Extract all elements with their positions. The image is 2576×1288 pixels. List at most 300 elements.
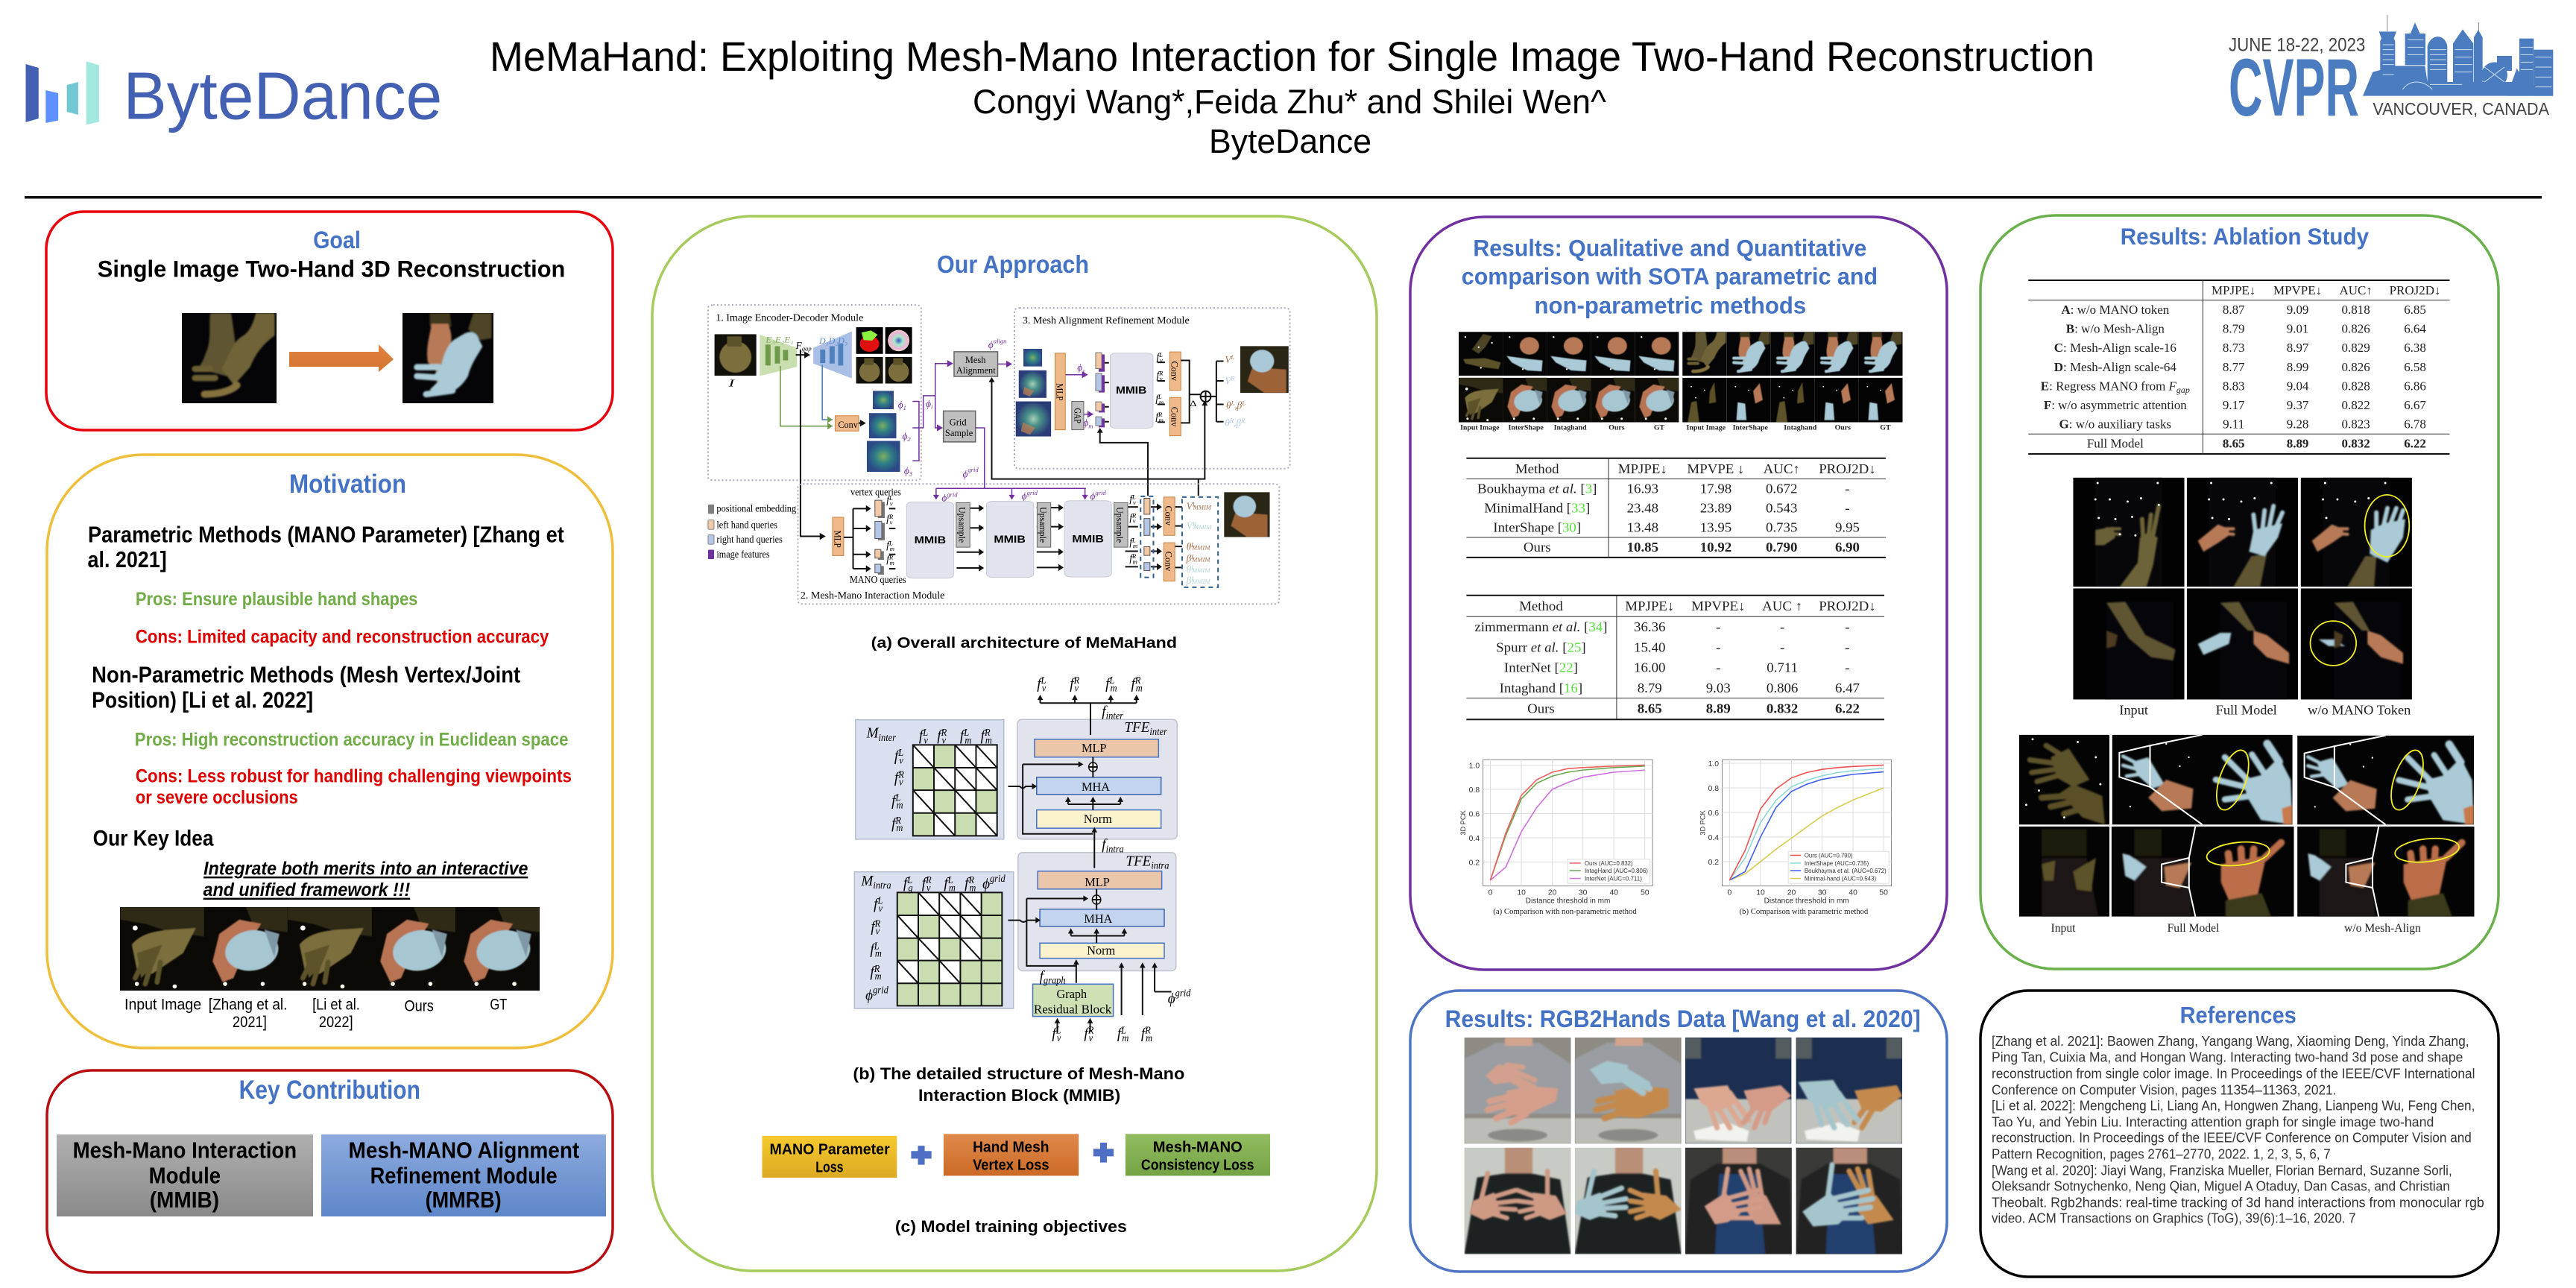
heading: our approach: Our Approach bbox=[937, 250, 1089, 278]
mesh alignment box: Mesh bbox=[965, 354, 986, 365]
module 2: mesh-mano interaction bbox=[798, 484, 1279, 604]
TFE inter block bbox=[1017, 703, 1177, 839]
M intra attention matrix: ϕ bbox=[982, 876, 990, 892]
TFE intra block bbox=[1018, 836, 1176, 970]
module 1: image encoder-decoder bbox=[708, 305, 921, 480]
feature labels: f bbox=[1070, 675, 1074, 692]
chart: non-parametric PCK: IntagHand (AUC=0.806) bbox=[1585, 868, 1648, 874]
module 2: mesh-mano interaction: L bbox=[1190, 564, 1195, 571]
icon: Vancouver skyline bbox=[2363, 15, 2553, 96]
module 3: mesh alignment refinement: ,β bbox=[1234, 417, 1241, 429]
feature labels: v bbox=[1042, 683, 1046, 694]
table: ablation: 6.86 bbox=[2404, 379, 2426, 393]
caption: input: Input bbox=[2051, 922, 2076, 935]
M inter attention matrix: M bbox=[867, 724, 879, 742]
module 3: mesh alignment refinement: m bbox=[1159, 398, 1164, 405]
chart: non-parametric PCK: 0.8 bbox=[1469, 786, 1480, 795]
chart: parametric PCK: 0.4 bbox=[1708, 834, 1719, 842]
module 2: mesh-mano interaction: MMIM bbox=[1191, 543, 1210, 551]
table: ablation: 0.818 bbox=[2342, 303, 2370, 317]
key idea statement line 2: and unified framework !!! bbox=[203, 880, 411, 900]
header rule bbox=[25, 196, 2542, 198]
module 3: mesh alignment refinement: ϕ bbox=[1077, 362, 1082, 373]
goal statement: Single Image Two-Hand 3D Reconstruction bbox=[98, 256, 565, 282]
table: non-parametric methods: 8.65 bbox=[1638, 701, 1662, 716]
feature labels: f bbox=[1037, 675, 1041, 692]
M intra attention matrix: L bbox=[874, 941, 880, 951]
module 3: mesh alignment refinement: R bbox=[1229, 417, 1234, 424]
grid sample box: Grid bbox=[950, 417, 967, 427]
chart: non-parametric PCK: 0.4 bbox=[1469, 835, 1480, 843]
chart: non-parametric PCK: 3D PCK bbox=[1459, 810, 1468, 836]
module 3: mesh alignment refinement: L bbox=[1241, 399, 1246, 406]
module 2: mesh-mano interaction: f bbox=[886, 554, 889, 565]
module 3: mesh alignment refinement: R bbox=[1230, 375, 1235, 382]
parametric methods line 2: al. 2021] bbox=[88, 548, 167, 572]
reference list: Pattern Recognition, pages 2761–2770, 2022. 1, 2, 3, 5, 6, 7 bbox=[1992, 1146, 2331, 1162]
TFE intra block: MLP bbox=[1085, 875, 1110, 889]
title block bbox=[490, 33, 2094, 160]
non-parametric methods: Non-Parametric Methods (Mesh Vertex/Joint bbox=[92, 663, 520, 688]
feature labels: f bbox=[1131, 675, 1135, 692]
table: ablation: 0.828 bbox=[2342, 379, 2370, 393]
table: non-parametric methods: 36.36 bbox=[1634, 619, 1665, 634]
module 2: mesh-mano interaction: L bbox=[1190, 553, 1195, 561]
table: non-parametric methods: - bbox=[1780, 640, 1784, 654]
logo wordmark: ByteDance bbox=[123, 58, 442, 133]
module 3: mesh alignment refinement: ,β bbox=[1234, 400, 1243, 411]
ablation upper contents bbox=[2028, 224, 2449, 717]
M intra attention matrix: R bbox=[925, 875, 932, 886]
module 1: image encoder-decoder: D₁D₂D₃ bbox=[818, 337, 847, 346]
TFE inter block: Norm bbox=[1084, 812, 1112, 826]
caption b line 2: Interaction Block (MMIB) bbox=[918, 1085, 1120, 1105]
heading: RGB2Hands: Results: RGB2Hands Data [Wang et al. 2020] bbox=[1445, 1006, 1921, 1032]
table: ablation: B: w/o Mesh-Align bbox=[2066, 322, 2165, 335]
arrow bbox=[289, 344, 394, 372]
TFE intra block: MHA bbox=[1084, 912, 1112, 926]
chart: parametric PCK bbox=[1699, 760, 1891, 916]
image: input hands bbox=[182, 313, 277, 403]
chart: parametric PCK: 0 bbox=[1728, 888, 1732, 897]
module 2: mesh-mano interaction: R bbox=[1192, 520, 1197, 528]
module 2: mesh-mano interaction: L bbox=[1190, 540, 1195, 548]
module 2: mesh-mano interaction: f bbox=[886, 494, 889, 505]
table: non-parametric methods: Method bbox=[1519, 599, 1563, 613]
table: ablation: 8.77 bbox=[2223, 360, 2245, 374]
table: non-parametric methods: 6.47 bbox=[1835, 681, 1860, 695]
table: parametric methods: 0.543 bbox=[1766, 501, 1797, 515]
module 3: mesh alignment refinement: f bbox=[1156, 370, 1159, 381]
phi labels: ϕ bbox=[1022, 490, 1027, 502]
module 1: image encoder-decoder: ϕ bbox=[903, 431, 907, 442]
qualitative comparison image grid bbox=[1459, 332, 1903, 423]
table: parametric methods: 17.98 bbox=[1700, 482, 1731, 496]
module 2: mesh-mano interaction: L bbox=[1131, 493, 1136, 500]
module 2: mesh-mano interaction: f bbox=[886, 539, 889, 550]
table: parametric methods: MinimalHand [33] bbox=[1484, 501, 1590, 515]
module 2: mesh-mano interaction: V bbox=[1187, 520, 1193, 531]
module 2: mesh-mano interaction: 2. Mesh-Mano Interaction Module bbox=[801, 590, 945, 601]
panel: our approach bbox=[652, 216, 1377, 1271]
table: parametric methods: 13.95 bbox=[1700, 520, 1731, 534]
image grid captions: Input Image bbox=[1687, 424, 1726, 432]
table: ablation: 0.823 bbox=[2342, 417, 2370, 432]
module 2: mesh-mano interaction: MMIM bbox=[1193, 523, 1212, 531]
module 3: mesh alignment refinement: L bbox=[1231, 399, 1235, 406]
TFE inter block: f bbox=[1102, 703, 1106, 720]
table: non-parametric methods: zimmermann et al. [34] bbox=[1474, 619, 1607, 634]
phi labels: i bbox=[931, 402, 933, 410]
table: ablation: 9.28 bbox=[2287, 417, 2308, 432]
M intra attention matrix: f bbox=[903, 875, 907, 891]
logo: CVPR 2023 Vancouver bbox=[2229, 15, 2553, 133]
table: non-parametric methods: - bbox=[1845, 619, 1850, 634]
table: non-parametric methods: 8.89 bbox=[1706, 701, 1731, 716]
module 3: mesh alignment refinement: v bbox=[1160, 375, 1163, 382]
caption: without mesh-align: w/o Mesh-Align bbox=[2344, 922, 2421, 935]
mesh alignment box: Alignment bbox=[956, 365, 996, 376]
MMRB label: Mesh-MANO Alignment bbox=[349, 1138, 579, 1164]
phi labels: ϕ bbox=[926, 398, 931, 409]
non-parametric cons: Cons: Less robust for handling challenging viewpoints bbox=[136, 766, 572, 787]
M inter attention matrix: f bbox=[981, 727, 985, 744]
loss box: mesh-MANO consistency: Mesh-MANO bbox=[1153, 1139, 1243, 1155]
feature labels: R bbox=[1144, 1025, 1151, 1036]
table: ablation: 9.01 bbox=[2287, 322, 2308, 335]
references contents bbox=[1992, 1002, 2484, 1226]
chart: parametric PCK: 0.8 bbox=[1708, 785, 1719, 793]
module 2: mesh-mano interaction: L bbox=[888, 494, 893, 502]
MANO token comparison images bbox=[2073, 478, 2412, 699]
grid sample box: Sample bbox=[945, 428, 973, 438]
module 2: mesh-mano interaction: Upsample bbox=[1114, 507, 1124, 543]
module 2: mesh-mano interaction: R bbox=[888, 513, 894, 520]
caption: zhang: [Zhang et al. bbox=[209, 995, 287, 1014]
phi labels: align bbox=[994, 337, 1006, 344]
module 1: image encoder-decoder: Conv bbox=[838, 420, 858, 430]
graph residual block: Residual Block bbox=[1034, 1002, 1112, 1017]
chart: parametric PCK: Boukhayma et al. (AUC=0.672) bbox=[1805, 868, 1887, 874]
image grid captions: GT bbox=[1880, 424, 1891, 432]
conference date: JUNE 18-22, 2023 bbox=[2229, 34, 2365, 55]
module 2: mesh-mano interaction: v bbox=[1133, 517, 1136, 525]
table: parametric methods: 0.672 bbox=[1766, 482, 1797, 496]
M intra attention matrix: m bbox=[949, 883, 956, 893]
M intra attention matrix: m bbox=[875, 971, 882, 982]
feature labels: m bbox=[1136, 683, 1143, 694]
M inter attention matrix: f bbox=[937, 727, 941, 744]
reference list bbox=[1992, 1034, 2484, 1226]
table: ablation: 8.65 bbox=[2223, 437, 2245, 450]
M intra attention matrix: m bbox=[875, 948, 882, 959]
feature labels: m bbox=[1146, 1032, 1152, 1044]
module 1: image encoder-decoder: 1 bbox=[903, 404, 906, 411]
phi labels: grid bbox=[947, 491, 958, 499]
chart: parametric PCK: 3D PCK bbox=[1699, 810, 1707, 836]
table: ablation: 8.97 bbox=[2287, 341, 2308, 355]
module 3: mesh alignment refinement: L bbox=[1158, 393, 1162, 400]
MMIB label: Mesh-Mano Interaction bbox=[73, 1138, 297, 1164]
module 2: mesh-mano interaction: R bbox=[1131, 552, 1137, 560]
module 2: mesh-mano interaction: MMIB bbox=[994, 534, 1026, 546]
graph residual block bbox=[1033, 984, 1114, 1017]
table: parametric methods: InterShape [30] bbox=[1493, 520, 1581, 534]
table: non-parametric methods: 9.03 bbox=[1706, 681, 1731, 695]
non-parametric pros: Pros: High reconstruction accuracy in Euclidean space bbox=[135, 730, 568, 751]
table: non-parametric methods: 16.00 bbox=[1634, 660, 1665, 675]
module 2: mesh-mano interaction: MANO queries bbox=[850, 575, 906, 585]
chart: overall architecture diagram bbox=[708, 305, 1290, 651]
M intra attention matrix: ϕ bbox=[865, 987, 873, 1004]
chart: non-parametric PCK: 30 bbox=[1579, 888, 1588, 897]
chart: parametric PCK: Distance threshold in mm bbox=[1764, 897, 1849, 906]
TFE inter block: TFE bbox=[1124, 719, 1149, 736]
M intra attention matrix: v bbox=[876, 926, 880, 937]
caption: input image: Input Image bbox=[124, 995, 201, 1014]
M inter attention matrix: f bbox=[894, 748, 898, 764]
M inter attention matrix: m bbox=[985, 735, 992, 745]
caption: ground truth: GT bbox=[490, 995, 508, 1014]
table: non-parametric methods: AUC ↑ bbox=[1762, 599, 1802, 613]
module 3: mesh alignment refinement: MLP bbox=[1054, 383, 1064, 401]
legend: right hand queries bbox=[716, 534, 783, 546]
module 3: mesh alignment refinement: MMIB bbox=[1116, 385, 1146, 397]
TFE intra block: Norm bbox=[1087, 943, 1115, 958]
M inter attention matrix: L bbox=[922, 727, 928, 738]
table: ablation: 9.37 bbox=[2287, 398, 2308, 412]
M inter attention matrix: L bbox=[963, 727, 969, 738]
feature labels: f bbox=[1040, 968, 1044, 985]
table: parametric methods: 0.790 bbox=[1766, 540, 1797, 555]
M intra attention matrix: f bbox=[874, 895, 878, 912]
comparison image strip bbox=[120, 907, 540, 991]
loss box: mesh-MANO consistency bbox=[1126, 1134, 1270, 1175]
table: parametric methods: 6.90 bbox=[1835, 540, 1860, 555]
caption: full model: Full Model bbox=[2216, 703, 2277, 717]
legend bbox=[708, 503, 797, 561]
module 2: mesh-mano interaction: R bbox=[888, 554, 894, 561]
image grid captions bbox=[1460, 424, 1891, 432]
table: parametric methods: 9.95 bbox=[1835, 520, 1860, 534]
loss box: hand mesh vertex: Hand Mesh bbox=[973, 1139, 1049, 1155]
chart: non-parametric PCK: 0 bbox=[1489, 888, 1493, 897]
module 3: mesh alignment refinement: GAP bbox=[1072, 408, 1082, 423]
graph residual block: Graph bbox=[1057, 987, 1087, 1001]
M inter attention matrix: L bbox=[894, 792, 900, 803]
TFE intra block: TFE bbox=[1126, 853, 1151, 870]
reference list: Conference on Computer Vision, pages 11354–11363, 2021. bbox=[1992, 1082, 2336, 1097]
phi labels: ϕ bbox=[962, 468, 967, 479]
M inter attention matrix: v bbox=[942, 735, 946, 745]
chart: parametric PCK: 0.2 bbox=[1708, 859, 1719, 867]
chart: non-parametric PCK: 1.0 bbox=[1469, 762, 1480, 770]
chart: non-parametric PCK: Ours (AUC=0.832) bbox=[1585, 860, 1633, 867]
ablation lower contents bbox=[2019, 735, 2475, 935]
table: ablation: 9.09 bbox=[2287, 303, 2308, 317]
table: parametric methods bbox=[1466, 458, 1886, 558]
module 2: mesh-mano interaction: L bbox=[1131, 537, 1136, 544]
module 1: image encoder-decoder: 2 bbox=[907, 435, 911, 443]
M intra attention matrix: v bbox=[879, 903, 883, 914]
table: parametric methods: 0.735 bbox=[1766, 520, 1797, 534]
module 2: mesh-mano interaction: f bbox=[886, 513, 889, 524]
chart: parametric PCK: Ours (AUC=0.790) bbox=[1805, 852, 1853, 859]
connector lines bbox=[796, 350, 1208, 540]
reference list: [Zhang et al. 2021]: Baowen Zhang, Yangang Wang, Xiaoming Deng, Yinda Zhang, bbox=[1992, 1034, 2469, 1049]
M inter attention matrix: R bbox=[984, 727, 991, 738]
table: non-parametric methods: Spurr et al. [25] bbox=[1496, 640, 1586, 654]
feature labels: f bbox=[1084, 1025, 1088, 1042]
table: ablation: F: w/o asymmetric attention bbox=[2044, 398, 2187, 412]
caption: li year: 2022] bbox=[319, 1012, 353, 1031]
caption: full model: Full Model bbox=[2168, 922, 2220, 935]
chart: parametric PCK: InterShape (AUC=0.735) bbox=[1805, 860, 1869, 867]
module 3: mesh alignment refinement: Δ bbox=[1190, 399, 1197, 408]
table: parametric methods: - bbox=[1845, 501, 1850, 515]
heading: ablation study: Results: Ablation Study bbox=[2121, 224, 2369, 250]
feature labels: R bbox=[1073, 675, 1079, 686]
non-parametric methods line 2: Position) [Li et al. 2022] bbox=[92, 689, 313, 713]
module 3: mesh alignment refinement: L bbox=[1158, 351, 1163, 359]
M intra attention matrix: f bbox=[870, 964, 874, 980]
heading: key contribution: Key Contribution bbox=[239, 1076, 420, 1105]
heading line 3: non-parametric methods bbox=[1534, 292, 1806, 318]
module 1: image encoder-decoder: E₃E₂E₁ bbox=[765, 335, 794, 344]
chart: non-parametric PCK: (a) Comparison with non-parametric method bbox=[1493, 908, 1638, 916]
module 3: mesh alignment refinement: R bbox=[1158, 411, 1163, 418]
M inter attention matrix: v bbox=[899, 755, 903, 765]
table: ablation: PROJ2D↓ bbox=[2390, 283, 2441, 297]
table: non-parametric methods: 0.711 bbox=[1767, 660, 1798, 675]
caption c: (c) Model training objectives bbox=[895, 1216, 1127, 1236]
table: parametric methods: PROJ2D↓ bbox=[1819, 461, 1876, 476]
module 2: mesh-mano interaction: L bbox=[1192, 500, 1196, 508]
module 3: mesh alignment refinement: R bbox=[1240, 417, 1246, 424]
MMIB label line 2: Module bbox=[149, 1164, 221, 1189]
module 2: mesh-mano interaction: MMIM bbox=[1193, 503, 1212, 511]
M intra attention matrix: M bbox=[861, 873, 873, 889]
module 2: mesh-mano interaction: Upsample bbox=[956, 507, 966, 543]
loss box: hand mesh vertex bbox=[944, 1134, 1079, 1175]
TFE inter block: MLP bbox=[1082, 741, 1106, 755]
feature labels: f bbox=[1052, 1025, 1056, 1042]
reference list: [Wang et al. 2020]: Jiayi Wang, Franziska Mueller, Florian Bernard, Suzanne Sorli, bbox=[1992, 1163, 2452, 1178]
feature labels: L bbox=[1055, 1025, 1061, 1036]
caption: zhang year: 2021] bbox=[233, 1012, 267, 1031]
title: MeMaHand: Exploiting Mesh-Mano Interaction for Single Image Two-Hand Reconstruction bbox=[490, 33, 2094, 80]
grid sample box bbox=[944, 411, 976, 442]
table: ablation: 9.17 bbox=[2223, 398, 2245, 412]
feature labels: v bbox=[1089, 1032, 1093, 1044]
key idea heading: Our Key Idea bbox=[93, 827, 214, 851]
MMRB label line 3: (MMRB) bbox=[426, 1188, 502, 1213]
table: non-parametric methods: PROJ2D↓ bbox=[1819, 599, 1876, 613]
table: parametric methods: MPJPE↓ bbox=[1618, 461, 1667, 476]
M intra attention matrix: R bbox=[874, 918, 880, 929]
table: ablation: 6.85 bbox=[2404, 303, 2426, 317]
non-parametric cons line 2: or severe occlusions bbox=[136, 788, 298, 808]
table: non-parametric methods: - bbox=[1780, 619, 1784, 634]
table: ablation: 9.04 bbox=[2287, 379, 2309, 393]
caption b: (b) The detailed structure of Mesh-Mano bbox=[853, 1064, 1184, 1083]
TFE intra block: intra bbox=[1106, 844, 1124, 854]
M inter attention matrix: m bbox=[965, 735, 971, 745]
module box: MMRB bbox=[321, 1134, 606, 1216]
M inter attention matrix: L bbox=[897, 748, 903, 758]
module 2: mesh-mano interaction: θ bbox=[1187, 564, 1191, 575]
reference list: Tao Yu, and Yebin Liu. Interacting attention graph for single image two-hand bbox=[1992, 1114, 2434, 1130]
table: ablation: 0.822 bbox=[2342, 398, 2370, 412]
module 2: mesh-mano interaction: MMIM bbox=[1191, 566, 1210, 574]
loss box: MANO parameter bbox=[762, 1136, 897, 1178]
M intra attention matrix bbox=[854, 872, 1014, 1008]
table: ablation: D: Mesh-Align scale-64 bbox=[2054, 360, 2177, 374]
module 3: mesh alignment refinement: v bbox=[1082, 367, 1085, 374]
feature labels: grid bbox=[1175, 988, 1191, 999]
table: ablation: 8.89 bbox=[2287, 437, 2308, 450]
image grid captions: Ours bbox=[1609, 424, 1625, 432]
table: ablation: 0.826 bbox=[2342, 360, 2370, 374]
panel: ablation study bbox=[1980, 215, 2498, 969]
feature labels: graph bbox=[1044, 975, 1066, 985]
M inter attention matrix: f bbox=[894, 769, 898, 786]
TFE inter block: inter bbox=[1149, 727, 1168, 737]
chart: non-parametric PCK: 10 bbox=[1517, 888, 1526, 897]
table: ablation: 6.58 bbox=[2404, 360, 2426, 374]
chart: non-parametric PCK: InterNet (AUC=0.711) bbox=[1585, 875, 1642, 882]
chart: non-parametric PCK: 50 bbox=[1641, 888, 1650, 897]
M intra attention matrix: f bbox=[870, 941, 874, 958]
table: ablation bbox=[2028, 280, 2449, 454]
caption: input: Input bbox=[2119, 703, 2148, 717]
module 2: mesh-mano interaction: Conv bbox=[1163, 505, 1172, 526]
M inter attention matrix: v bbox=[924, 735, 928, 745]
module 3: mesh alignment refinement: Conv bbox=[1169, 407, 1178, 427]
charts area bbox=[1459, 760, 1891, 916]
module 3: mesh alignment refinement: θ bbox=[1225, 417, 1230, 429]
image grid captions: InterShape bbox=[1733, 424, 1769, 432]
chart: non-parametric PCK: 0.6 bbox=[1469, 810, 1480, 818]
feature labels: v bbox=[1057, 1032, 1061, 1044]
feature labels: v bbox=[1074, 683, 1079, 694]
feature labels: m bbox=[1122, 1032, 1128, 1044]
table: non-parametric methods: - bbox=[1716, 619, 1720, 634]
M inter attention matrix: R bbox=[941, 727, 947, 738]
table: non-parametric methods: - bbox=[1845, 660, 1850, 675]
module 2: mesh-mano interaction: v bbox=[890, 518, 893, 525]
feature labels: f bbox=[1117, 1025, 1121, 1042]
heading: goal: Goal bbox=[313, 226, 361, 253]
module 2: mesh-mano interaction: m bbox=[1133, 558, 1137, 565]
module 2: mesh-mano interaction: f bbox=[1129, 493, 1132, 504]
mesh alignment box bbox=[954, 352, 998, 376]
table: ablation: 0.829 bbox=[2342, 341, 2370, 355]
chart: non-parametric PCK: 0.2 bbox=[1469, 859, 1480, 867]
image grid captions: Input Image bbox=[1460, 424, 1500, 432]
panel: goal bbox=[46, 212, 613, 430]
table: non-parametric methods bbox=[1466, 596, 1884, 719]
M intra attention matrix: v bbox=[926, 883, 931, 893]
M inter attention matrix: f bbox=[919, 727, 923, 744]
M intra attention matrix: L bbox=[906, 875, 912, 886]
table: ablation: G: w/o auxiliary tasks bbox=[2059, 417, 2171, 432]
chart: parametric PCK: 10 bbox=[1756, 888, 1765, 897]
chart: parametric PCK: 30 bbox=[1818, 888, 1827, 897]
reference list: video. ACM Transactions on Graphics (ToG), 39(6):1–16, 2020. 7 bbox=[1992, 1210, 2356, 1226]
module 2: mesh-mano interaction: vertex queries bbox=[850, 487, 901, 498]
table: parametric methods: 10.92 bbox=[1700, 540, 1731, 555]
